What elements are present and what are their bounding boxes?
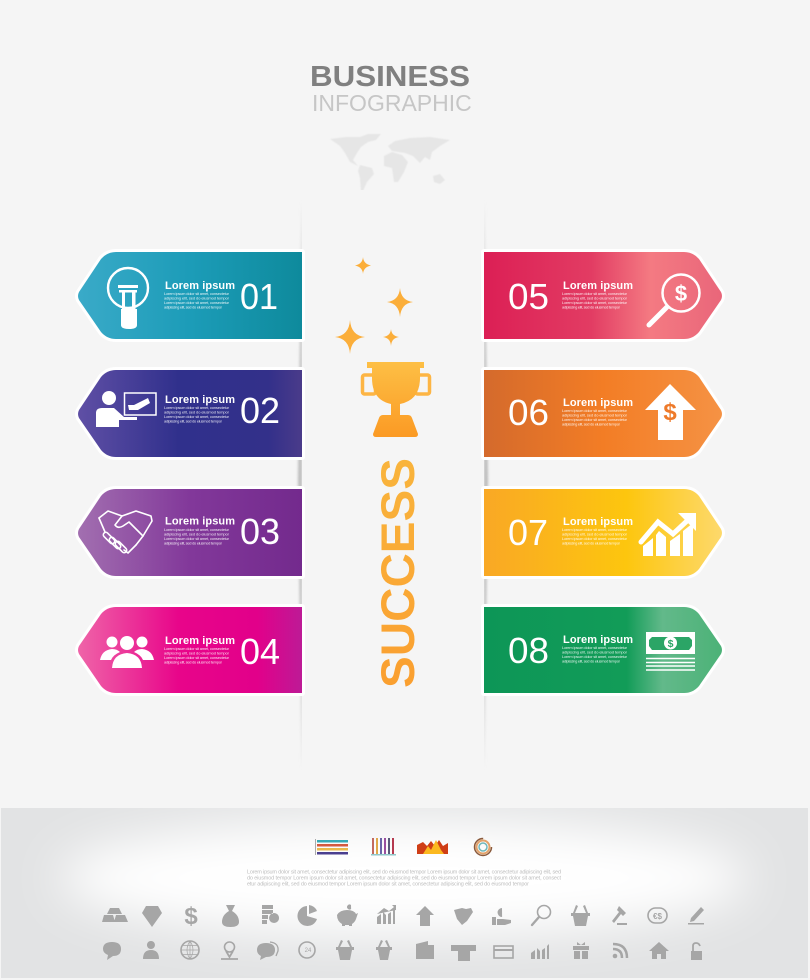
- footer text: etur adipiscing elit, sed do eiusmod tempor Lorem ipsum dolor sit amet, consectetur adipiscing elit, sed do eiusmod tempor: [247, 882, 529, 888]
- text: step 03: Lorem ipsum dolor sit amet, consectetur: [164, 536, 230, 541]
- number 06: 06: [508, 392, 549, 433]
- text: step 06: Lorem ipsum dolor sit amet, consectetur: [562, 417, 628, 422]
- mini bar chart: [315, 839, 348, 855]
- icon: growth chart: [377, 905, 396, 924]
- icon: arrow dollar: [416, 906, 434, 926]
- text: step 04: adipiscing elit, sed do eiusmod tempor: [164, 650, 230, 656]
- number 05: 05: [508, 276, 549, 317]
- text: step 02: Lorem ipsum: [165, 394, 235, 406]
- text: step 08: adipiscing elit, sed do eiusmod tempor: [562, 658, 621, 664]
- icon: diamond: [142, 906, 162, 927]
- mini area chart: [417, 840, 448, 854]
- icon: basket add: [336, 940, 354, 960]
- icon: location pin: [221, 942, 238, 959]
- text: step 07: Lorem ipsum: [563, 516, 633, 528]
- text: step 07: adipiscing elit, sed do eiusmod tempor: [562, 532, 628, 536]
- text: step 03: Lorem ipsum dolor sit amet, consectetur: [164, 527, 230, 532]
- central panel: [298, 190, 488, 780]
- icon: chat bubbles: [257, 942, 278, 960]
- text: step 03: [164, 516, 235, 546]
- text: step 03: adipiscing elit, sed do eiusmod tempor: [164, 532, 230, 536]
- icon: basket remove: [376, 940, 392, 960]
- text: step 04: Lorem ipsum: [165, 635, 235, 647]
- panel: step 05: [484, 252, 722, 339]
- icon: handshake: [99, 511, 152, 554]
- text: step 08: Lorem ipsum dolor sit amet, consectetur: [562, 645, 628, 650]
- panel: step 04: [78, 607, 302, 693]
- icon: piggy bank: [337, 905, 358, 926]
- icon: growth chart: [641, 513, 696, 556]
- text: step 03: Lorem ipsum: [165, 516, 235, 528]
- text: step 04: [164, 635, 235, 664]
- icon: magnifier dollar: $: [675, 281, 687, 306]
- text: step 02: adipiscing elit, sed do eiusmod tempor: [164, 410, 230, 414]
- text: step 05: Lorem ipsum dolor sit amet, consectetur: [562, 300, 628, 305]
- icon: 24 hour support: 24: [305, 948, 312, 954]
- panel: step 07: [484, 489, 722, 576]
- icon: banknotes: [646, 632, 695, 670]
- text: step 02: adipiscing elit, sed do eiusmod tempor: [164, 418, 223, 424]
- icon: pen: [688, 907, 704, 924]
- icon: atm: [451, 945, 476, 961]
- text: step 01: [164, 280, 235, 310]
- icon: hand coin: [492, 908, 511, 925]
- text: step 06: [562, 397, 633, 426]
- text: step 06: Lorem ipsum dolor sit amet, consectetur: [562, 408, 628, 413]
- icon: up arrow dollar: [645, 384, 696, 440]
- icon: light bulb: [108, 268, 148, 329]
- text: step 01: adipiscing elit, sed do eiusmod tempor: [164, 304, 223, 310]
- text: step 05: [562, 280, 633, 310]
- number 08: 08: [508, 630, 549, 671]
- number 03: 03: [240, 511, 280, 552]
- text: step 01: adipiscing elit, sed do eiusmod tempor: [164, 296, 230, 300]
- text: step 08: Lorem ipsum dolor sit amet, consectetur: [562, 654, 628, 659]
- text: step 03: adipiscing elit, sed do eiusmod tempor: [164, 540, 223, 546]
- panel: footer band: [1, 808, 808, 978]
- panel: step 03: [78, 489, 302, 576]
- text: step 06: adipiscing elit, sed do eiusmod tempor: [562, 412, 628, 418]
- icon: credit card: [494, 946, 513, 958]
- text: step 01: Lorem ipsum dolor sit amet, consectetur: [164, 291, 230, 296]
- number 02: 02: [240, 390, 280, 431]
- panel: step 08: [484, 607, 722, 693]
- icon: basket: [571, 905, 590, 926]
- text: step 08: [562, 634, 633, 664]
- icon: pie chart: [297, 905, 317, 926]
- text: step 05: adipiscing elit, sed do eiusmod tempor: [562, 296, 628, 300]
- icon: up arrow dollar: $: [663, 399, 677, 426]
- text: step 08: Lorem ipsum: [563, 634, 633, 646]
- icon: wallet: [416, 941, 434, 959]
- icon: gavel: [612, 906, 627, 925]
- text: step 06: Lorem ipsum: [563, 397, 633, 409]
- text: step 05: adipiscing elit, sed do eiusmod tempor: [562, 304, 621, 310]
- mini donut chart: [474, 838, 492, 856]
- icon: gift: [573, 942, 589, 959]
- text: step 06: adipiscing elit, sed do eiusmod tempor: [562, 422, 621, 426]
- icon: padlock: [691, 943, 702, 960]
- panel: step 02: [78, 370, 302, 457]
- panel: step 06: [484, 370, 722, 457]
- text: step 04: adipiscing elit, sed do eiusmod tempor: [164, 660, 223, 664]
- icon: presenter: [96, 391, 156, 427]
- icon: money bag: [222, 905, 239, 927]
- panel: step 01: [78, 252, 302, 339]
- text: step 08: adipiscing elit, sed do eiusmod tempor: [562, 650, 628, 654]
- text: step 04: Lorem ipsum dolor sit amet, consectetur: [164, 646, 230, 651]
- text: step 01: Lorem ipsum dolor sit amet, consectetur: [164, 300, 230, 305]
- title: BUSINESS: [310, 61, 470, 93]
- text: step 07: Lorem ipsum dolor sit amet, consectetur: [562, 527, 628, 532]
- number 01: 01: [240, 276, 278, 317]
- icon row 1: [102, 903, 704, 930]
- icon: person: [143, 941, 159, 959]
- icon: speech bubble: [103, 942, 121, 960]
- icon: banknotes: $: [668, 638, 674, 650]
- footer text: Lorem ipsum dolor sit amet, consectetur adipiscing elit, sed do eiusmod tempor Lorem ipsum dolor sit amet, consectetur adipiscing elit, sed: [247, 870, 561, 876]
- text: step 07: adipiscing elit, sed do eiusmod tempor: [562, 540, 621, 546]
- icon: 24 hour support: [299, 942, 315, 958]
- icon: rss: [613, 944, 627, 958]
- icon: dollar: $: [184, 903, 198, 930]
- text: step 05: Lorem ipsum dolor sit amet, consectetur: [562, 291, 628, 296]
- text: step 04: Lorem ipsum dolor sit amet, consectetur: [164, 655, 230, 660]
- icon: home: [649, 942, 669, 959]
- text: step 02: Lorem ipsum dolor sit amet, consectetur: [164, 414, 230, 419]
- title: [310, 61, 472, 116]
- icon: gold bars: [102, 908, 128, 922]
- icon: handshake: [454, 908, 473, 925]
- text: step 02: [164, 394, 235, 424]
- sparkles: [335, 257, 413, 354]
- text: step 02: Lorem ipsum dolor sit amet, consectetur: [164, 405, 230, 410]
- icon: currency exchange: [648, 908, 667, 923]
- text: step 07: [562, 516, 633, 546]
- icon: growth chart: [531, 944, 549, 959]
- footer text: do eiusmod tempor Lorem ipsum dolor sit amet, consectetur adipiscing elit, sed do eiusmod tempor Lorem ipsum dolor sit amet, consect: [247, 876, 561, 882]
- icon: globe: [181, 941, 199, 959]
- footer text: [247, 870, 561, 888]
- text: step 05: Lorem ipsum: [563, 280, 633, 292]
- mini column chart: [371, 838, 396, 856]
- icon: magnifier: [532, 906, 550, 925]
- icon: currency exchange: €$: [653, 912, 662, 921]
- text: step 01: Lorem ipsum: [165, 280, 235, 292]
- icon: magnifier dollar: [649, 274, 700, 325]
- title: INFOGRAPHIC: [312, 90, 472, 116]
- number 07: 07: [508, 512, 548, 553]
- world map: [330, 134, 450, 191]
- icon row 2: [103, 940, 702, 961]
- text: step 07: Lorem ipsum dolor sit amet, consectetur: [562, 536, 628, 541]
- success label: SUCCESS: [371, 458, 424, 688]
- number 04: 04: [240, 631, 280, 672]
- icon: people: [100, 636, 154, 668]
- icon: trophy: [362, 362, 430, 437]
- icon: coin stack: [262, 905, 279, 924]
